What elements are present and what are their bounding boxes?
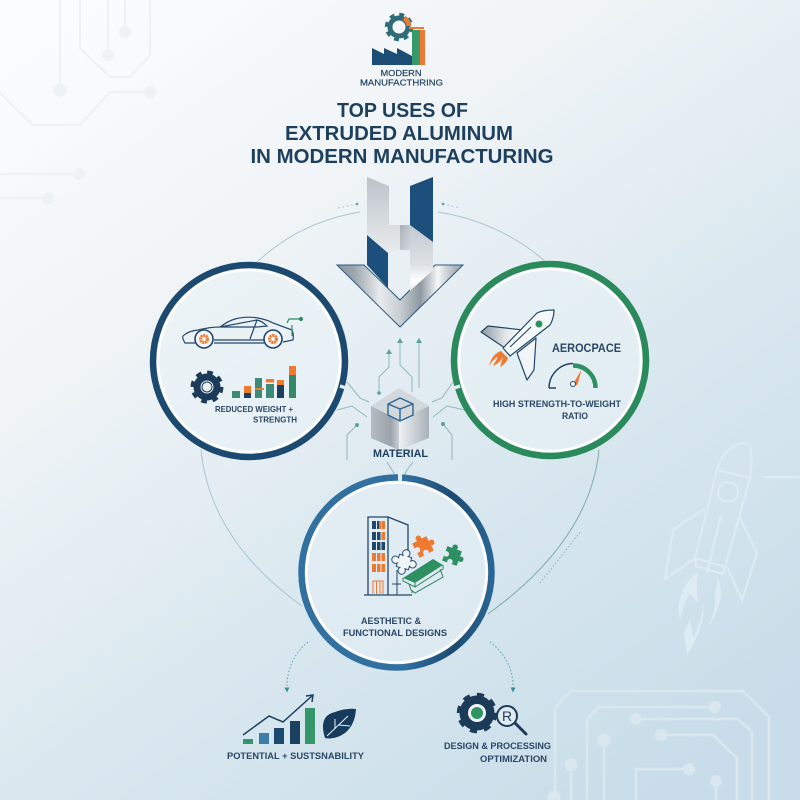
dotted arrow: right xyxy=(490,642,513,690)
label: OPTIMIZATION xyxy=(480,754,547,764)
label: REDUCED WEIGHT + xyxy=(215,404,293,414)
label: MATERIAL xyxy=(373,448,428,460)
title: TOP USES OF xyxy=(337,100,468,122)
ring xyxy=(153,265,349,457)
label: FUNCTIONAL DESIGNS xyxy=(343,628,447,638)
bar chart xyxy=(232,366,296,398)
icon: small cube xyxy=(388,398,413,421)
logo text xyxy=(360,69,443,88)
icon: gauge xyxy=(549,364,596,388)
title: EXTRUDED ALUMINUM xyxy=(285,123,513,145)
material cube xyxy=(371,388,429,460)
icon: factory xyxy=(372,28,425,65)
icon: leaf xyxy=(323,709,356,738)
logo text: MODERN xyxy=(380,69,422,78)
icon: jet xyxy=(481,310,554,380)
background circuit pattern: bottom right xyxy=(548,691,769,800)
logo text: MANUFACTHRING xyxy=(360,78,443,88)
title xyxy=(250,100,554,168)
logo xyxy=(360,14,443,88)
ring xyxy=(302,470,492,668)
label: STRENGTH xyxy=(253,414,297,424)
icon: building xyxy=(364,517,412,595)
panel: potential and sustainability xyxy=(227,695,364,761)
background circuit pattern: top left xyxy=(0,0,156,204)
icon: extruded aluminum arrow xyxy=(337,177,463,327)
label xyxy=(343,616,447,638)
panel: aerospace circle xyxy=(451,264,646,456)
label: DESIGN & PROCESSING xyxy=(444,741,551,751)
icon: gear xyxy=(192,372,222,402)
icon: puzzle pieces xyxy=(389,530,468,577)
label: POTENTIAL + SUSTSNABILITY xyxy=(227,751,364,761)
icon: gear xyxy=(459,695,495,731)
panel: automotive circle xyxy=(153,265,349,457)
panel: architecture circle xyxy=(302,470,492,668)
icon: gear xyxy=(386,14,412,40)
ring xyxy=(451,264,646,456)
cube xyxy=(371,388,429,450)
aerospace heading: AEROCPACE xyxy=(552,341,621,355)
label xyxy=(215,404,297,424)
label: HIGH STRENGTH-TO-WEIGHT xyxy=(493,399,621,409)
label: RATIO xyxy=(562,411,588,421)
dotted arrow: left xyxy=(287,642,308,690)
connecting orbit arcs xyxy=(201,203,599,614)
label: AESTHETIC & xyxy=(361,616,422,626)
icon: car xyxy=(183,317,302,348)
panel: design and processing optimization xyxy=(444,695,551,764)
background rocket outline xyxy=(665,443,800,655)
trend arrow xyxy=(243,695,313,735)
circuit connectors around material cube xyxy=(337,338,465,480)
label xyxy=(444,741,551,764)
bar chart xyxy=(243,708,315,744)
icon: extruded beam xyxy=(403,559,443,593)
title: IN MODERN MANUFACTURING xyxy=(250,146,554,168)
label xyxy=(493,399,621,421)
icon: magnifier with R: R xyxy=(502,708,512,724)
